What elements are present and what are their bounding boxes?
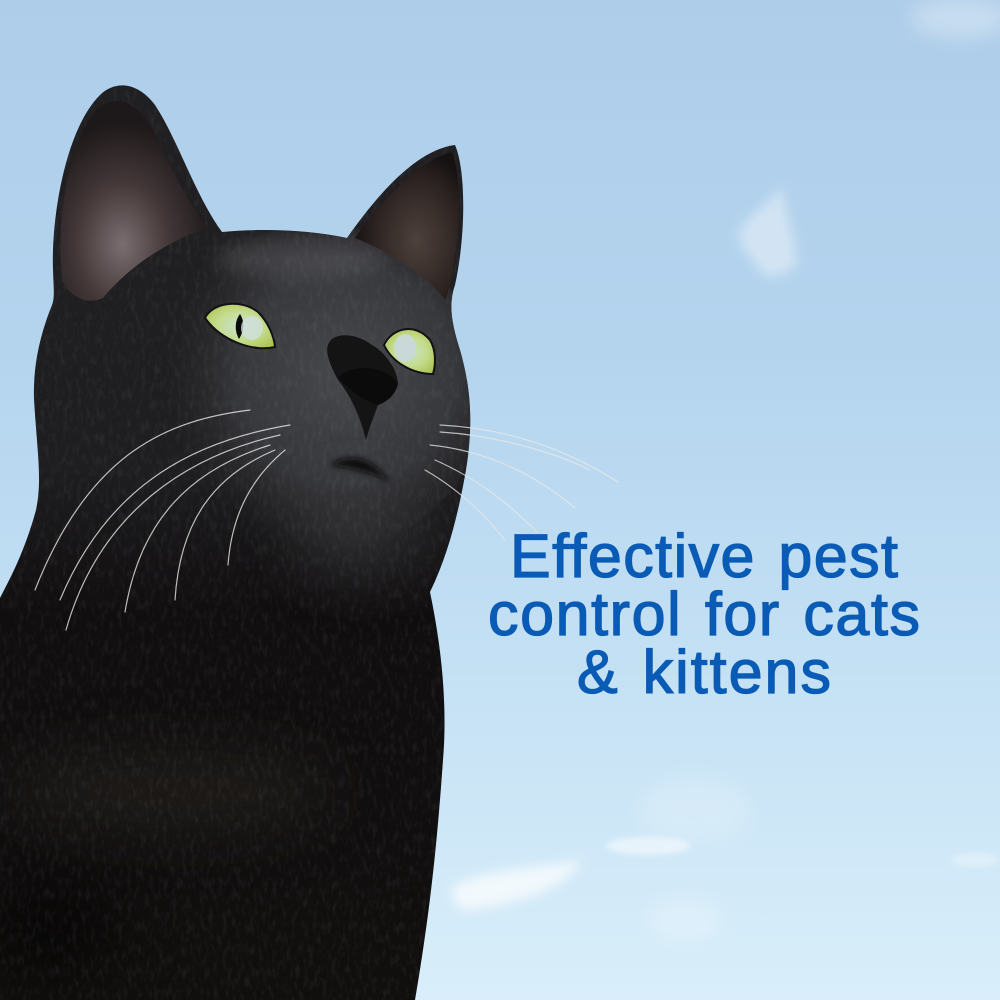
headline [488,522,920,706]
headline: & kittens [577,638,831,706]
clouds [450,0,1000,942]
nose and mouth [327,335,398,482]
cat [0,0,618,1000]
right ear inner [355,152,459,300]
headline: Effective pest [510,522,898,590]
fur texture [0,89,466,1000]
left ear inner [60,101,208,301]
right eye [384,329,435,374]
fur shading [0,0,485,1000]
headline: control for cats [488,580,920,648]
whiskers [35,410,618,630]
left eye [205,304,275,348]
cat silhouette [0,85,470,1000]
